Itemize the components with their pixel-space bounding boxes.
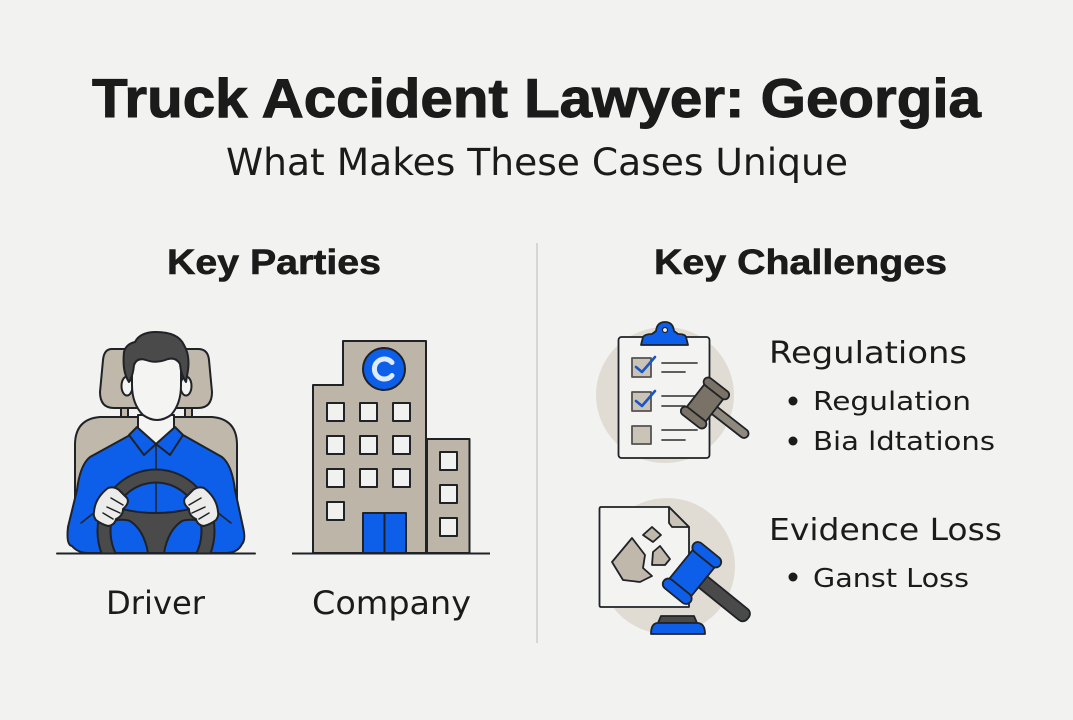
icon: driver: [56, 331, 256, 554]
heading: regulations: Regulations: [769, 336, 967, 371]
icon: evidence loss document with gavel: [599, 498, 766, 641]
icon: regulations clipboard with gavel: [596, 322, 762, 463]
heading: evidence loss: Evidence Loss: [769, 513, 1002, 548]
bullet list: regulations: [788, 387, 995, 457]
icon: company building: [292, 341, 490, 554]
title: Truck Accident Lawyer: Georgia: [92, 67, 981, 129]
bullet list: regulations: Regulation: [813, 387, 971, 417]
bullet list: evidence loss: Ganst Loss: [813, 564, 969, 594]
heading: key parties: Key Parties: [167, 243, 381, 282]
heading: key challenges: Key Challenges: [654, 243, 947, 282]
company logo badge: [363, 348, 405, 390]
label: driver: Driver: [106, 584, 206, 622]
bullet list: regulations: Bia ldtations: [813, 427, 995, 457]
label: company: Company: [312, 584, 471, 622]
subtitle: What Makes These Cases Unique: [226, 141, 848, 184]
